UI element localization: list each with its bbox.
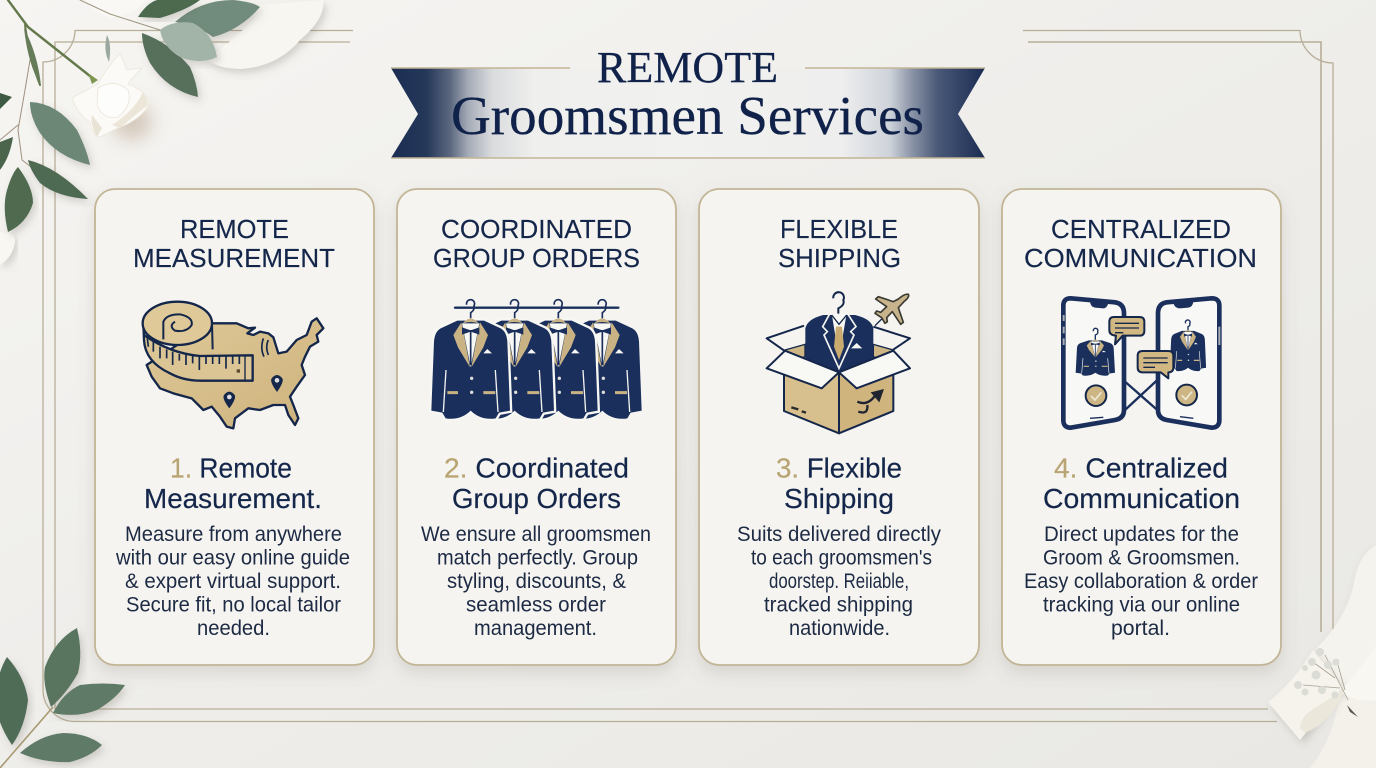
icon: four suits on a rail xyxy=(431,300,642,419)
card heading: MEASUREMENT xyxy=(133,245,335,273)
card body text: tracked shipping xyxy=(764,594,913,616)
suit 4 xyxy=(563,319,642,419)
suit 1 outline xyxy=(431,321,510,419)
card body text: Suits delivered directly xyxy=(737,523,941,546)
decoration: bottom-right ribbon and baby's breath xyxy=(1268,545,1376,768)
card body text: management. xyxy=(474,617,597,640)
card heading: CENTRALIZED xyxy=(1051,216,1231,244)
title banner xyxy=(391,43,985,158)
card body text: seamless order xyxy=(466,594,606,616)
suit in box xyxy=(805,292,873,372)
card heading xyxy=(778,216,901,273)
stems xyxy=(0,0,160,170)
suit 2 xyxy=(475,319,554,419)
plane xyxy=(875,294,909,324)
card body text: We ensure all groomsmen xyxy=(421,523,651,546)
card heading: REMOTE xyxy=(180,216,289,244)
card subheading: Shipping xyxy=(784,483,894,514)
rail xyxy=(455,304,618,311)
suit 3 xyxy=(519,319,598,419)
card heading xyxy=(133,216,335,273)
suit 3 outline xyxy=(519,321,598,419)
card body text: match perfectly. Group xyxy=(437,546,638,570)
baby's breath xyxy=(1294,648,1358,717)
card heading: GROUP ORDERS xyxy=(433,245,640,273)
decoration: top-left flower and eucalyptus xyxy=(0,0,323,265)
title line 1: REMOTE xyxy=(597,43,778,92)
label marks xyxy=(791,407,806,413)
icon: US map with tape measure xyxy=(143,302,323,428)
suit 1 xyxy=(431,319,510,419)
card subheading: 3. Flexible xyxy=(776,452,902,484)
icon: two phones with chat xyxy=(1063,298,1219,428)
card heading: FLEXIBLE xyxy=(780,216,898,244)
card body text: doorstep. Reiiable, xyxy=(769,570,909,593)
title line 2: Groomsmen Services xyxy=(451,85,924,146)
left phone xyxy=(1063,298,1124,428)
front flaps xyxy=(767,351,839,388)
chat bubble right xyxy=(1138,351,1173,378)
panel: flexible shipping xyxy=(699,189,979,665)
card body text: to each groomsmen's xyxy=(751,546,932,570)
card subheading: 4. Centralized xyxy=(1054,452,1228,484)
card body text xyxy=(115,523,350,640)
card body text: Measure from anywhere xyxy=(125,523,342,546)
card body text xyxy=(1024,523,1258,640)
card body text xyxy=(737,523,941,640)
panel: remote measurement xyxy=(95,189,374,665)
card subheading: Measurement. xyxy=(144,483,322,514)
suit 2 outline xyxy=(475,321,554,419)
icon: open box with suit and plane xyxy=(767,292,910,433)
card heading: COMMUNICATION xyxy=(1024,245,1257,273)
white petal xyxy=(85,0,146,18)
card subheading xyxy=(776,452,902,514)
silk ribbon top-left xyxy=(207,0,323,69)
card heading xyxy=(1024,216,1257,273)
chat bubble left xyxy=(1109,317,1144,344)
back flaps xyxy=(767,326,910,352)
card heading: COORDINATED xyxy=(441,216,632,244)
box inside xyxy=(785,344,893,360)
decoration: bottom-left leaves xyxy=(0,628,125,768)
card subheading xyxy=(144,452,322,514)
connecting cross xyxy=(1125,380,1157,410)
card body text: Direct updates for the xyxy=(1044,523,1239,546)
ribbon shape xyxy=(391,68,985,158)
card body text: needed. xyxy=(197,617,270,640)
card body text: with our easy online guide xyxy=(115,546,350,570)
panel: centralized communication xyxy=(1002,189,1281,665)
card body text: portal. xyxy=(1111,617,1170,640)
right phone xyxy=(1158,298,1219,428)
card body text: styling, discounts, & xyxy=(447,570,626,593)
card body text: Groom & Groomsmen. xyxy=(1043,546,1240,570)
card body text: Secure fit, no local tailor xyxy=(126,594,341,616)
card heading xyxy=(433,216,640,273)
white rose xyxy=(112,104,152,140)
card subheading: 1. Remote xyxy=(170,452,292,484)
box faces xyxy=(784,372,839,433)
card subheading xyxy=(1043,452,1240,514)
card body text: nationwide. xyxy=(789,617,890,640)
card subheading: Group Orders xyxy=(452,483,621,514)
card body text: & expert virtual support. xyxy=(125,570,341,593)
card body text: tracking via our online xyxy=(1043,594,1240,616)
eucalyptus leaves xyxy=(175,0,260,37)
panel: coordinated group orders xyxy=(397,189,676,665)
card heading: SHIPPING xyxy=(778,245,901,273)
card subheading: Communication xyxy=(1043,483,1240,514)
card subheading: 2. Coordinated xyxy=(444,452,629,484)
card body text: Easy collaboration & order xyxy=(1024,570,1258,593)
card subheading xyxy=(444,452,629,514)
card body text xyxy=(421,523,651,640)
